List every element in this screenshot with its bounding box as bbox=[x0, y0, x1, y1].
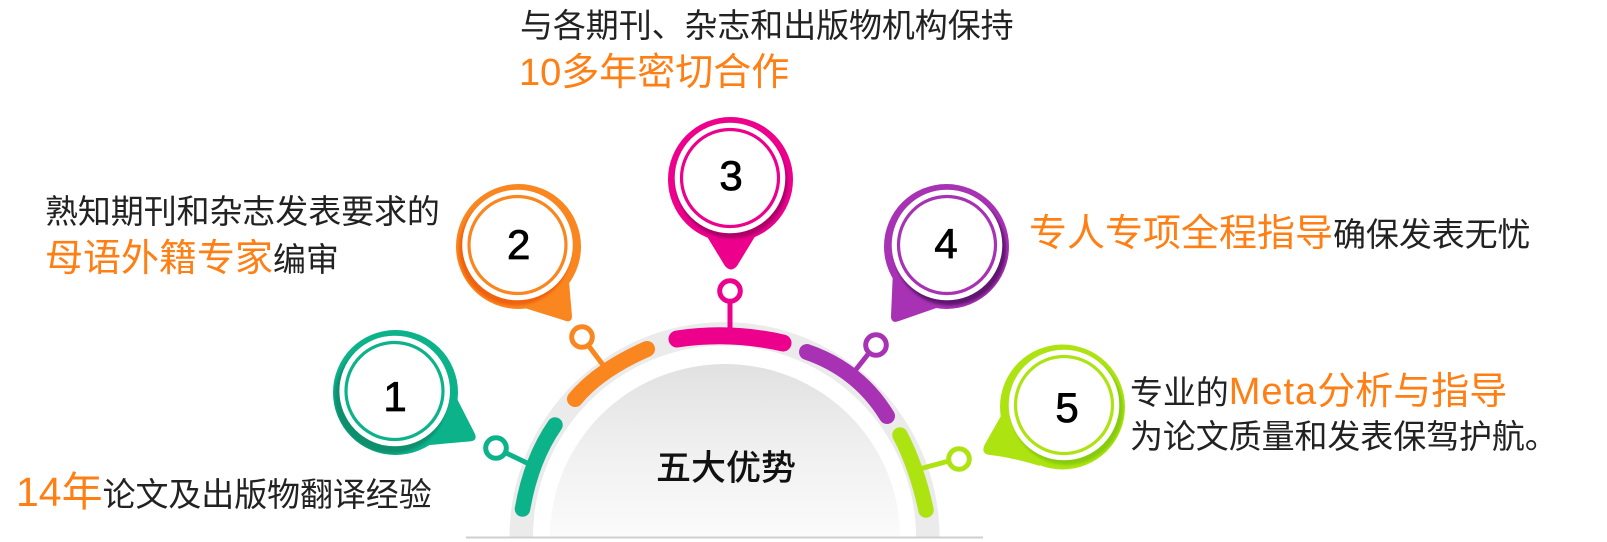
marker 3: 3 bbox=[719, 152, 743, 199]
text: advantage 2 line 2: 母语外籍专家编审 bbox=[45, 238, 339, 280]
arc segment and pin 4: purple bbox=[807, 335, 887, 416]
text: advantage 3 line 1: 与各期刊、杂志和出版物机构保持 bbox=[520, 7, 1014, 44]
marker 5: 5 bbox=[1055, 384, 1079, 431]
text: advantage 1: 14年论文及出版物翻译经验 bbox=[16, 469, 432, 515]
arc segment and pin 2: orange bbox=[572, 327, 647, 399]
text: advantage 3 line 2: 10多年密切合作 bbox=[519, 52, 789, 94]
marker 4: 4 bbox=[934, 220, 958, 267]
marker 2: 2 bbox=[507, 221, 530, 268]
text: advantage 5 line 2: 为论文质量和发表保驾护航。 bbox=[1130, 418, 1558, 455]
text: advantage 5 line 1: 专业的Meta分析与指导 bbox=[1130, 371, 1507, 413]
marker 1: 1 bbox=[383, 373, 407, 420]
marker 3 bbox=[668, 117, 793, 270]
central dome bbox=[466, 322, 983, 538]
marker 2 bbox=[456, 184, 581, 321]
arc segment and pin 5: lime bbox=[900, 435, 969, 510]
marker 4 bbox=[884, 184, 1009, 322]
arc segment and pin 3: pink bbox=[677, 281, 783, 343]
text: advantage 4: 专人专项全程指导确保发表无忧 bbox=[1029, 213, 1530, 255]
marker 5 bbox=[983, 344, 1125, 470]
diagram: five advantages dome with numbered pins bbox=[333, 117, 1125, 538]
marker 1 bbox=[333, 330, 476, 455]
arc segment and pin 1: green bbox=[486, 425, 555, 509]
text: advantage 2 line 1: 熟知期刊和杂志发表要求的 bbox=[45, 193, 440, 230]
title: five advantages: 五大优势 bbox=[656, 449, 796, 488]
